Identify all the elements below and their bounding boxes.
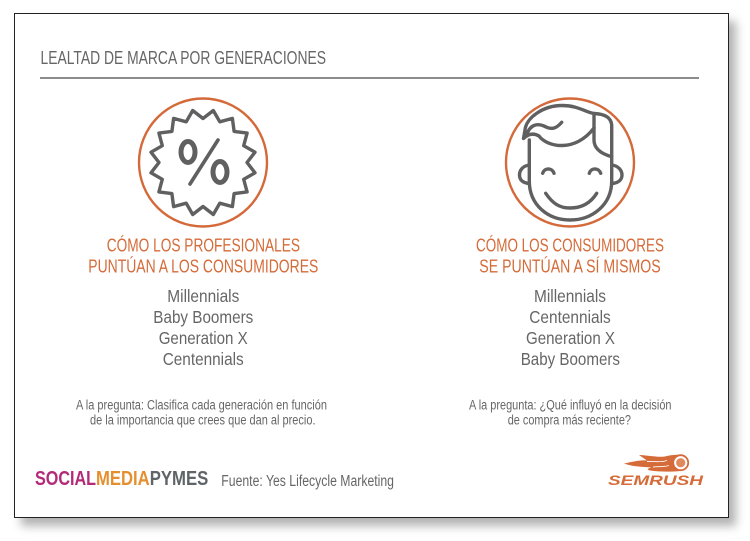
ranking list: consumers: Baby Boomers <box>521 349 620 369</box>
survey question: professionals: A la pregunta: Clasifica cada generación en función <box>76 398 327 412</box>
source credit: Fuente: Yes Lifecycle Marketing <box>221 473 394 490</box>
logo: Social Media Pymes <box>35 467 208 490</box>
ranking list: professionals: Centennials <box>163 349 244 369</box>
icon: smiling face <box>506 98 634 226</box>
ranking list: professionals <box>153 286 254 369</box>
survey question: consumers: de compra más reciente? <box>508 412 631 428</box>
survey question: professionals: de la importancia que crees que dan al precio. <box>90 412 316 428</box>
survey question: consumers <box>469 398 672 428</box>
panel: consumers <box>469 98 672 428</box>
heading: consumers: SE PUNTÚAN A SÍ MISMOS <box>479 255 661 276</box>
logo: Social Media Pymes: PYMES <box>150 467 208 490</box>
survey question: professionals <box>76 398 327 428</box>
icon: flame <box>624 455 688 472</box>
ranking list: consumers <box>521 286 620 369</box>
ranking list: consumers: Millennials <box>534 286 606 306</box>
ranking list: professionals: Baby Boomers <box>153 307 254 327</box>
ranking list: consumers: Generation X <box>526 328 615 348</box>
wordmark: SEMRUSH <box>608 472 704 488</box>
panel: professionals <box>76 98 327 428</box>
ranking list: professionals: Generation X <box>159 328 248 348</box>
heading: professionals: PUNTÚAN A LOS CONSUMIDORES <box>88 255 318 276</box>
heading: professionals <box>88 234 318 276</box>
ranking list: professionals: Millennials <box>167 286 240 306</box>
heading: professionals: CÓMO LOS PROFESIONALES <box>107 234 300 256</box>
logo: SEMrush <box>608 455 704 488</box>
logo: Social Media Pymes: SOCIAL <box>35 467 96 490</box>
survey question: consumers: A la pregunta: ¿Qué influyó en la decisión <box>469 398 672 412</box>
title: LEALTAD DE MARCA POR GENERACIONES <box>40 47 326 68</box>
ranking list: consumers: Centennials <box>529 307 611 327</box>
logo: Social Media Pymes: MEDIA <box>96 467 150 490</box>
heading: consumers: CÓMO LOS CONSUMIDORES <box>476 234 664 256</box>
heading: consumers <box>476 234 664 276</box>
icon: percent badge <box>139 98 267 226</box>
